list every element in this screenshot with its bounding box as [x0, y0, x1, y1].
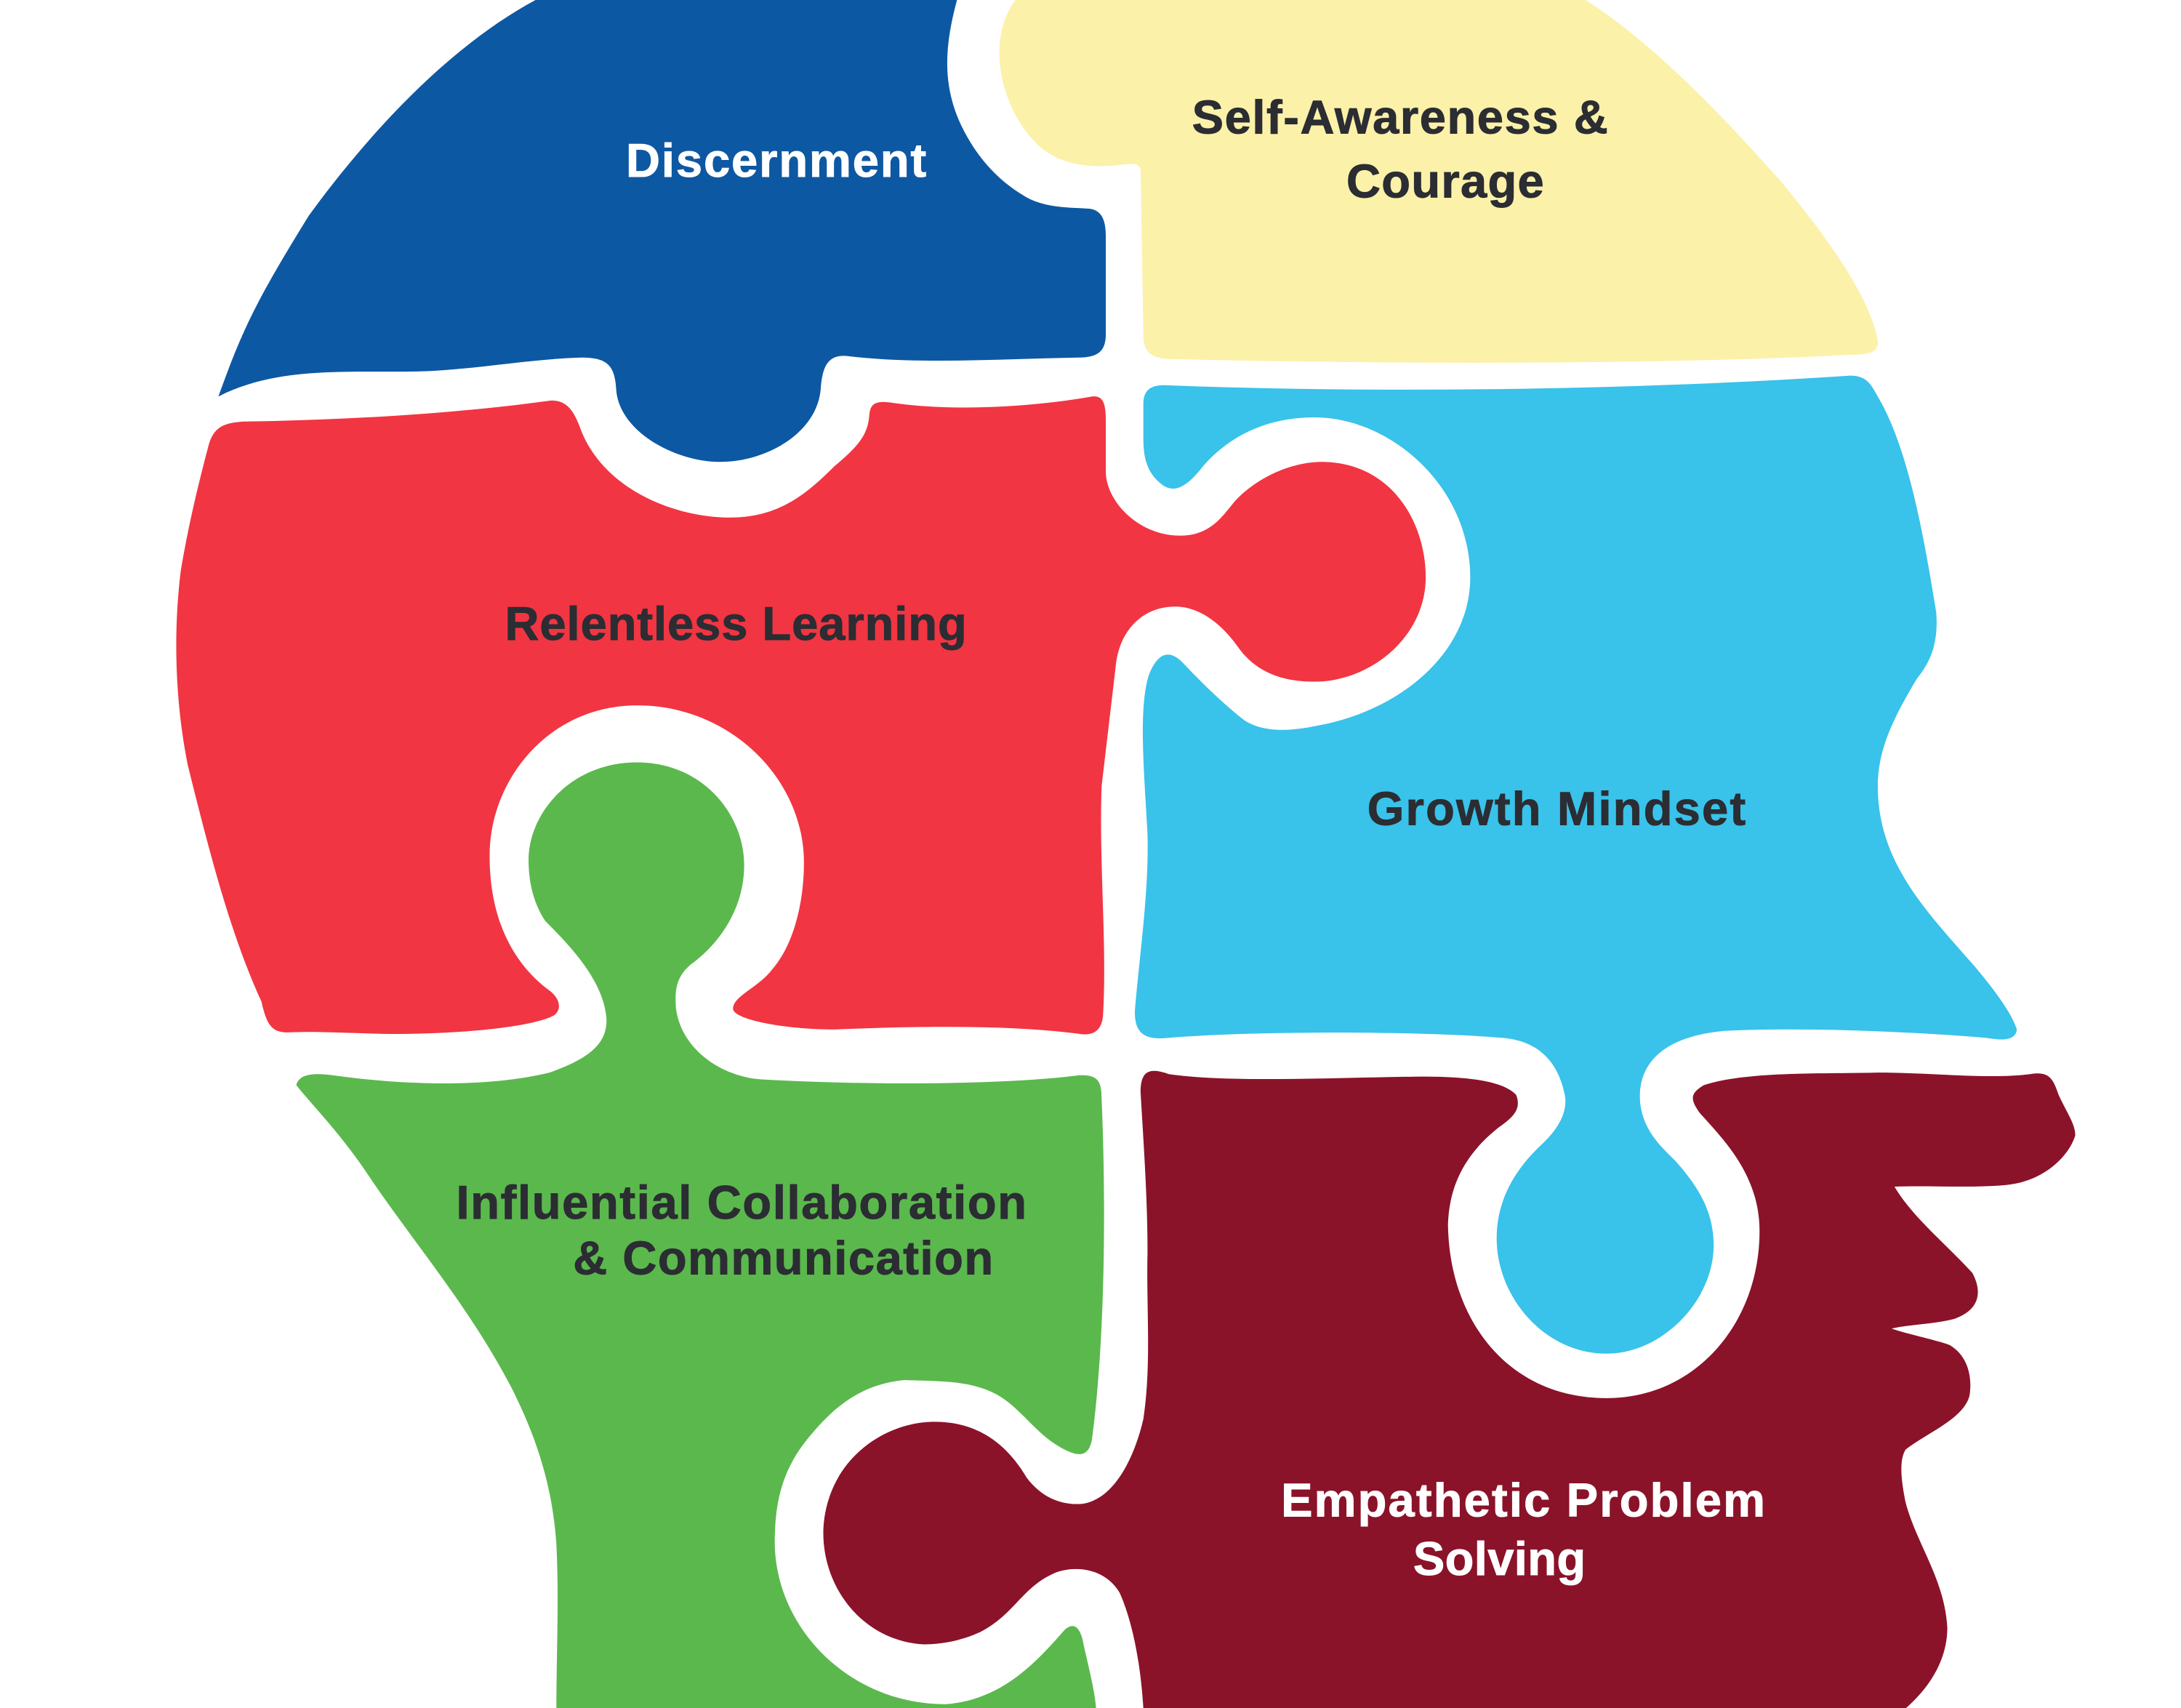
- panel: Relentless Learning puzzle piece: [176, 396, 1426, 1035]
- label: Self-Awareness and Courage: Courage: [1346, 155, 1544, 208]
- panel: Discernment puzzle piece: [218, 0, 1106, 462]
- panel: Growth Mindset puzzle piece: [1135, 376, 2017, 1354]
- label: Empathetic Problem Solving: Solving: [1413, 1532, 1586, 1585]
- label: Empathetic Problem Solving: Empathetic Problem: [1281, 1474, 1765, 1527]
- label: Self-Awareness and Courage: [1192, 91, 1608, 208]
- label: Discernment: Discernment: [626, 134, 926, 187]
- label: Relentless Learning: Relentless Learning: [505, 597, 967, 650]
- label: Growth Mindset: Growth Mindset: [1367, 782, 1746, 835]
- label: Influential Collaboration and Communication: & Communication: [573, 1232, 993, 1285]
- panel: Self-Awareness and Courage puzzle piece: [1000, 0, 1878, 363]
- label: Empathetic Problem Solving: [1281, 1474, 1765, 1585]
- panel: Influential Collaboration and Communication puzzle piece: [297, 763, 1104, 1708]
- label: Influential Collaboration and Communication: [457, 1176, 1027, 1285]
- panel: Empathetic Problem Solving puzzle piece: [823, 1071, 2076, 1708]
- label: Self-Awareness and Courage: Self-Awareness &: [1192, 91, 1608, 144]
- label: Influential Collaboration and Communication: Influential Collaboration: [457, 1176, 1027, 1229]
